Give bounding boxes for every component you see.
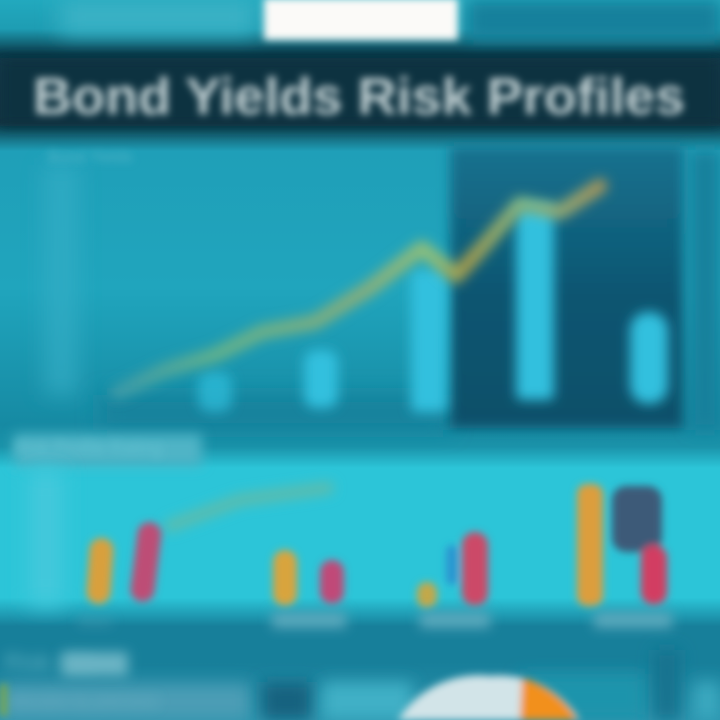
- group 3: [417, 532, 488, 608]
- trend line: [170, 488, 328, 526]
- group 2: [273, 550, 344, 606]
- pie chart: [398, 675, 580, 720]
- line trend: [118, 186, 600, 392]
- white header tab: [264, 0, 458, 40]
- title band: [0, 58, 720, 126]
- bottom panel: [0, 649, 720, 720]
- axis labels: Short: [78, 613, 112, 629]
- top banner: [60, 0, 720, 40]
- title: Bond Yields Risk Profiles: [33, 68, 685, 126]
- lower bar panel: [30, 470, 672, 629]
- group 4: [577, 484, 667, 606]
- caption: Risk mix: [4, 649, 95, 676]
- axis labels: [78, 612, 672, 629]
- chart subtitle: Bond Yields: [48, 149, 133, 166]
- lower panel heading strip: [14, 434, 202, 466]
- group 1: [86, 521, 163, 605]
- main chart panel: [44, 146, 720, 430]
- lower panel heading strip: Risk Profile Rating: [14, 438, 162, 458]
- bottom panel: Allocation by yield band: [10, 693, 157, 709]
- icon: legend marker: [0, 684, 7, 716]
- bars: [198, 205, 668, 412]
